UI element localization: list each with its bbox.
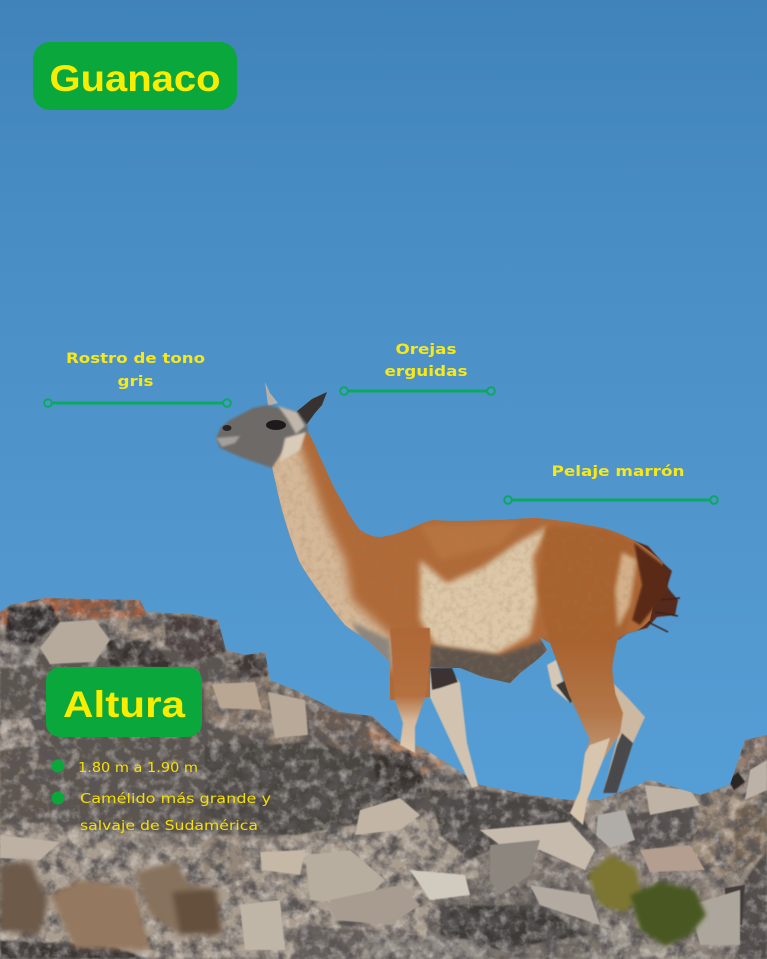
size bullet: [52, 791, 271, 834]
right lower slope: [430, 790, 590, 860]
lower light boulders: [0, 815, 480, 959]
fur texture: [274, 456, 635, 679]
label: ears: [340, 342, 495, 395]
far hind leg: [547, 660, 645, 793]
dry grass tufts: [0, 862, 222, 950]
rocky hillside: [0, 590, 767, 959]
label: face: [44, 351, 231, 407]
title: [33, 42, 237, 110]
label: ears: erguidas: [384, 364, 468, 380]
height heading: [46, 667, 202, 737]
guanaco: [216, 382, 690, 825]
head and ears: [216, 382, 327, 468]
dark mid slope: [0, 650, 440, 835]
far front leg: [430, 668, 478, 788]
near hind leg: [550, 640, 623, 825]
near front leg: [390, 628, 430, 753]
label: coat: Pelaje marrón: [552, 464, 684, 480]
height bullet: 1.80 m a 1.90 m: [78, 760, 198, 776]
green shrubs: [588, 855, 706, 946]
height heading: Altura: [63, 684, 185, 725]
tan rocks right of height badge: [204, 678, 310, 745]
top rocks: [0, 598, 146, 625]
body: [272, 432, 663, 700]
label: ears: Orejas: [396, 342, 456, 358]
size bullet: Camélido más grande y: [80, 791, 271, 807]
back shade: [426, 524, 512, 556]
label: face: gris: [118, 374, 154, 390]
tail: [618, 540, 680, 640]
texture: [0, 590, 767, 959]
tail again over fringe: [632, 543, 668, 625]
height panel: [46, 667, 271, 834]
title: Guanaco: [50, 58, 220, 99]
grey underside: [428, 638, 547, 683]
label: face: Rostro de tono: [66, 351, 205, 367]
crisp boulders: [0, 620, 767, 950]
cream neck: [262, 436, 395, 670]
size bullet: salvaje de Sudamérica: [80, 818, 258, 834]
label: coat: [504, 464, 718, 504]
haunch: [538, 526, 640, 697]
left slope: [0, 718, 40, 750]
cream belly: [420, 526, 548, 655]
